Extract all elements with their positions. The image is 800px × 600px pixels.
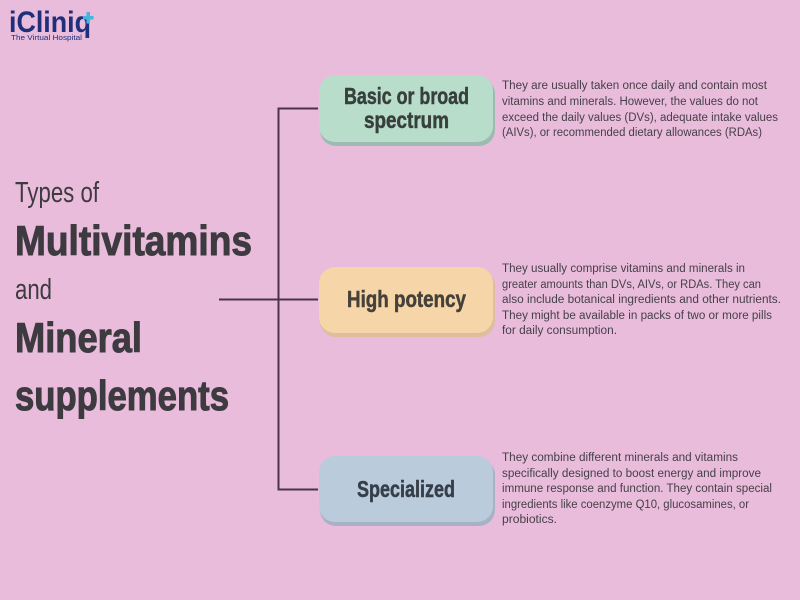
title [15, 177, 252, 419]
panel: basic or broad spectrum: Basic or broad [344, 83, 469, 109]
text block: basic or broad description: vitamins and minerals. However, the values do not [502, 96, 759, 108]
text block: basic or broad description: They are usually taken once daily and contain most [502, 80, 768, 92]
text block: basic or broad description: exceed the daily values (DVs), adequate intake values [502, 112, 778, 124]
text block: specialized description: immune response and function. They contain special [502, 483, 772, 495]
icon: plus sign [83, 12, 94, 24]
text block: high potency description: They might be available in packs of two or more pills [502, 310, 772, 322]
connector tree [219, 108, 318, 490]
text block: specialized description [502, 452, 772, 526]
text block: specialized description: specifically designed to boost energy and improve [502, 468, 761, 480]
panel: specialized: Specialized [357, 476, 455, 502]
logo: iCliniq: iCliniq [9, 6, 91, 39]
title: Types of [15, 177, 100, 209]
text block: basic or broad description: (AIVs), or recommended dietary allowances (RDAs) [502, 127, 762, 139]
title: supplements [15, 372, 229, 419]
text block: high potency description [502, 263, 781, 337]
text block: specialized description: ingredients like coenzyme Q10, glucosamines, or [502, 499, 749, 511]
text block: high potency description: also include botanical ingredients and other nutrients. [502, 294, 781, 306]
text block: specialized description: They combine different minerals and vitamins [502, 452, 738, 464]
logo: iCliniq: The Virtual Hospital [11, 35, 83, 42]
text block: high potency description: greater amounts than DVs, AIVs, or RDAs. They can [502, 279, 761, 291]
title: Multivitamins [15, 217, 252, 264]
panel: basic or broad spectrum: spectrum [364, 107, 449, 133]
text block: high potency description: They usually comprise vitamins and minerals in [502, 263, 745, 275]
title: Mineral [15, 314, 142, 361]
text block: high potency description: for daily consumption. [502, 325, 617, 337]
panel: basic or broad spectrum [319, 75, 495, 146]
title: and [15, 274, 52, 306]
panel: high potency: High potency [347, 286, 466, 312]
text block: specialized description: probiotics. [502, 514, 557, 526]
panel: specialized [319, 456, 495, 526]
text block: basic or broad description [502, 80, 778, 139]
panel: high potency [319, 267, 495, 337]
